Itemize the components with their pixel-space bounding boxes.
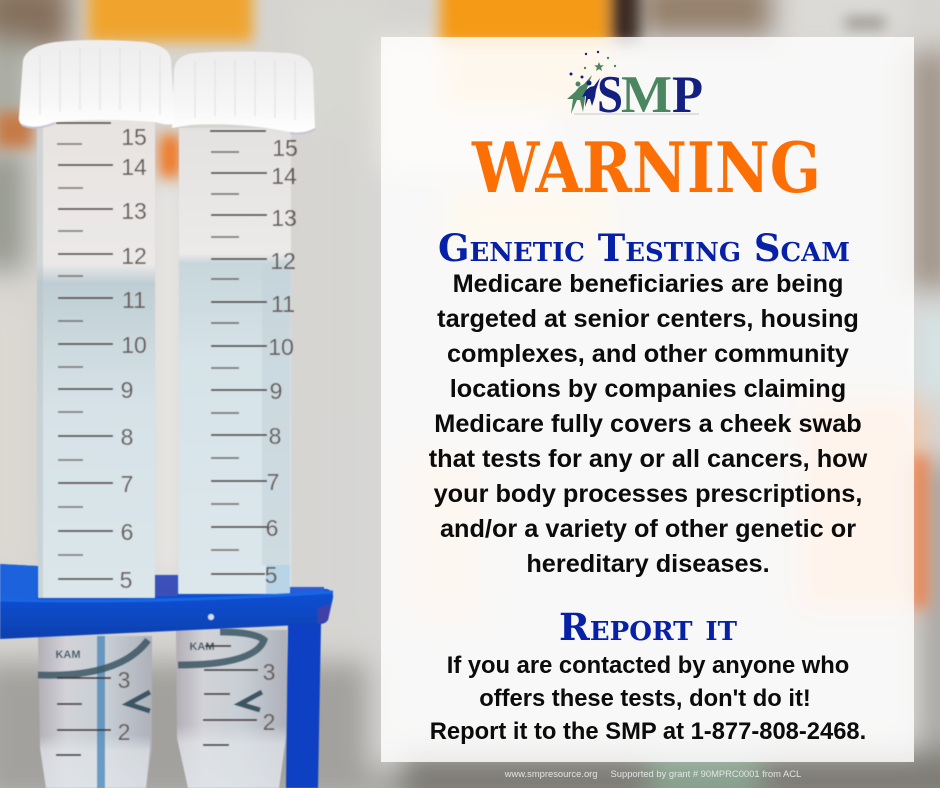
SMP logo: S [597,66,623,124]
body text: and/or a variety of other genetic or [440,515,856,543]
footer credits: www.smpresource.org Supported by grant # 90MPRC0001 from ACL [504,768,801,779]
body text: complexes, and other community [447,340,849,368]
tube bottoms below rack: 2 [118,719,130,745]
test tube: left: 12 [121,243,147,269]
test tube: right [179,128,298,595]
test tube: left: 15 [121,124,147,150]
test tube: right: 15 [272,135,298,161]
test tube: left: 8 [121,424,133,450]
tube bottoms below rack: KAM [189,641,215,653]
tube bottoms below rack: KAM [55,649,81,661]
test tube: left: 5 [120,567,132,593]
SMP logo: P [672,66,703,124]
tube bottoms below rack: 3 [263,659,275,685]
body text: targeted at senior centers, housing [437,305,859,333]
test tube: right: 7 [267,469,279,495]
report instructions [430,652,866,745]
test tube: right: 6 [266,515,278,541]
warning title: WARNING [471,128,821,209]
report instructions: Report it to the SMP at 1-877-808-2468. [430,718,866,745]
test tube: left: 14 [121,154,147,180]
test tube: right: 14 [271,163,297,189]
test tube: left: 9 [121,377,133,403]
tube bottoms below rack [38,630,287,788]
test tube: left: 7 [121,471,133,497]
body text: hereditary diseases. [526,550,770,578]
test tube: right: 5 [265,562,277,588]
report instructions: offers these tests, don't do it! [479,685,811,712]
test tube: right: 8 [269,423,281,449]
body text: that tests for any or all cancers, how [429,445,868,473]
test tube: left: 6 [121,519,133,545]
tube bottoms below rack: 3 [118,667,130,693]
tube bottoms below rack: 2 [263,709,275,735]
body text: your body processes prescriptions, [434,480,862,508]
test tube: right: 12 [270,248,296,274]
test tube: left [37,120,155,600]
test tube: right: 11 [271,291,295,317]
body text [429,270,868,578]
body text: Medicare fully covers a cheek swab [434,410,862,438]
white text panel [381,37,914,762]
test tube: right: 9 [270,378,282,404]
test tube: left: 11 [122,287,146,313]
body text: Medicare beneficiaries are being [453,270,843,298]
test tube: left: 10 [121,332,147,358]
heading: report it: Report it [559,605,738,649]
test tube: left: 13 [121,198,147,224]
SMP logo: M [621,66,672,124]
report instructions: If you are contacted by anyone who [447,652,849,679]
test tube: right: 13 [271,205,297,231]
test tube: right: 10 [268,334,294,360]
blue tube rack [0,564,333,788]
heading: genetic testing scam: Genetic Testing Scam [438,226,850,270]
tube caps [19,40,315,134]
SMP logo [567,51,703,124]
body text: locations by companies claiming [450,375,846,403]
